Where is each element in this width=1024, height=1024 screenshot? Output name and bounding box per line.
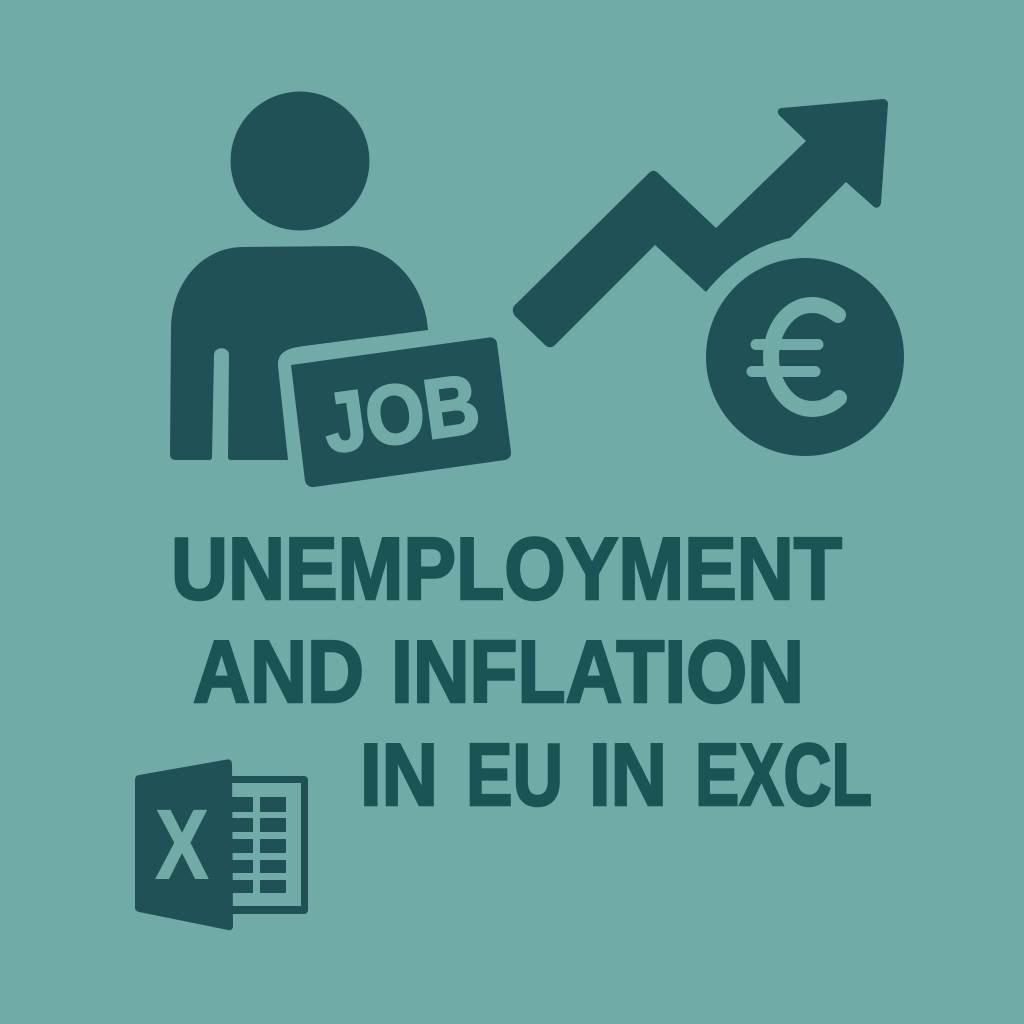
excel grid cells [230, 797, 286, 893]
title line 1: UNEMPLOYMENT [171, 519, 842, 618]
title line 3 [360, 725, 872, 824]
euro symbol [752, 305, 839, 409]
icon: excel logo [135, 759, 308, 930]
icon: rising arrow [513, 99, 888, 347]
title line 3: EXCL [695, 725, 872, 824]
excel sheet inner [232, 783, 301, 906]
title [171, 519, 872, 824]
title line 3: EU [466, 725, 563, 824]
excel X letter: X [156, 790, 208, 899]
title line 2: AND [193, 622, 364, 721]
excel back sheet [226, 776, 308, 914]
title line 2: INFLATION [391, 622, 804, 721]
icon: person head [230, 92, 370, 230]
title line 2 [193, 622, 804, 721]
icon: job card [291, 337, 511, 487]
excel front cover [135, 759, 233, 930]
coin disc [706, 258, 904, 456]
icon: job seeker with job sign [170, 92, 511, 487]
title line 3: IN [589, 725, 667, 824]
icon: person body [170, 246, 428, 460]
job card label: JOB [317, 356, 485, 471]
title line 3: IN [360, 725, 438, 824]
icon: euro coin [706, 258, 904, 456]
